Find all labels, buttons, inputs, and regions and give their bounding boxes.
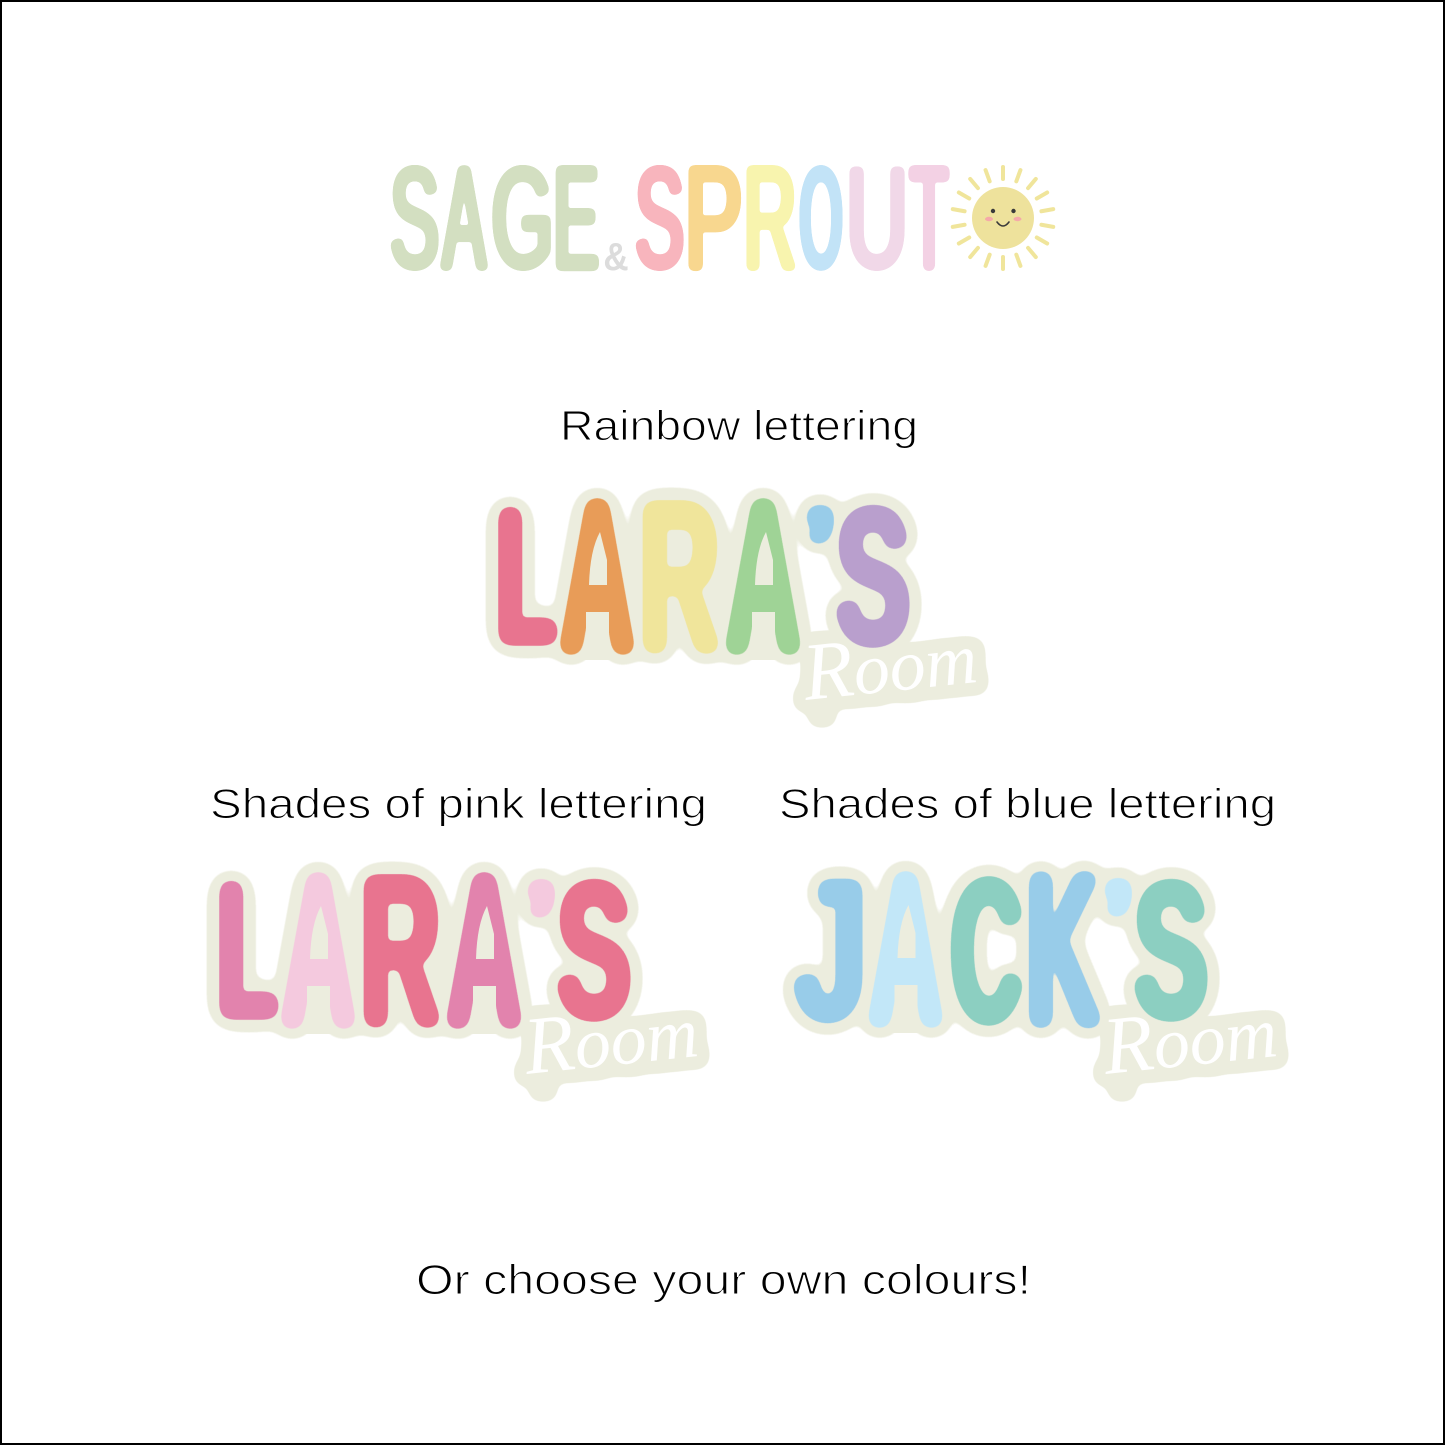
rainbow letters: A xyxy=(732,460,794,694)
sign backing: L xyxy=(218,848,275,1052)
sign backing: L xyxy=(497,474,554,678)
name sign: pink Lara's Room xyxy=(218,834,702,1092)
sign backing: R xyxy=(641,464,718,691)
logo word: SPROUT: S xyxy=(635,138,684,297)
pink letters: R xyxy=(362,838,439,1065)
logo word: SPROUT: T xyxy=(910,137,948,299)
rainbow letters: ’ xyxy=(804,488,836,616)
sign backing xyxy=(798,832,1281,1092)
blue letters xyxy=(798,832,1205,1067)
logo word: SPROUT: R xyxy=(744,138,796,300)
blue letters: C xyxy=(953,844,1020,1058)
script word: Room: Room xyxy=(1097,983,1281,1092)
sign backing: C xyxy=(953,844,1020,1058)
sign backing: R xyxy=(362,838,439,1065)
sign backing: A xyxy=(566,461,628,694)
name sign: blue Jack's Room xyxy=(798,832,1281,1092)
logo word: SPROUT: P xyxy=(684,138,743,300)
closing line: Or choose your own colours!: Or choose your own colours! xyxy=(416,1256,1031,1303)
sign backing: S xyxy=(559,850,628,1052)
blue letters: ’ xyxy=(1102,861,1134,989)
sign backing: J xyxy=(798,845,865,1055)
sign backing: S xyxy=(1136,850,1205,1052)
logo: Sage & Sprout xyxy=(390,136,1053,300)
blue letters: K xyxy=(1028,832,1096,1066)
rainbow letters: A xyxy=(566,461,628,694)
script word: Room: Room xyxy=(518,983,702,1092)
sign backing: S xyxy=(838,476,907,678)
logo word: SPROUT: O xyxy=(800,138,842,297)
logo word: SAGE: A xyxy=(443,137,485,299)
logo ampersand: & xyxy=(603,234,629,278)
sign backing: Room xyxy=(1097,983,1281,1092)
pink letters xyxy=(218,834,628,1068)
name sign: rainbow Lara's Room xyxy=(497,460,981,718)
rainbow letters: R xyxy=(641,464,718,691)
sign backing: A xyxy=(874,834,937,1067)
heading: Rainbow lettering: Rainbow lettering xyxy=(560,402,918,449)
pink letters: L xyxy=(218,848,275,1052)
heading: Shades of pink lettering: Shades of pink lettering xyxy=(210,780,707,827)
sign backing: K xyxy=(1028,832,1096,1066)
rainbow letters: L xyxy=(497,474,554,678)
heading: Shades of blue lettering: Shades of blue lettering xyxy=(779,780,1276,827)
logo word: SAGE: S xyxy=(390,138,439,297)
sign backing: Room xyxy=(518,983,702,1092)
pink letters: S xyxy=(559,850,628,1052)
pink letters: ’ xyxy=(525,862,557,990)
logo word: SPROUT xyxy=(635,137,948,300)
sign backing: A xyxy=(732,460,794,694)
logo word: SAGE: E xyxy=(553,136,599,299)
sign backing: A xyxy=(287,835,349,1068)
script word: Room: Room xyxy=(797,609,981,718)
pink letters: A xyxy=(453,834,515,1068)
sign backing: ’ xyxy=(804,488,836,616)
sign backing xyxy=(218,834,702,1092)
blue letters: A xyxy=(874,834,937,1067)
logo word: SPROUT: U xyxy=(846,139,908,297)
sign backing: ’ xyxy=(525,862,557,990)
blue letters: S xyxy=(1136,850,1205,1052)
sign backing: ’ xyxy=(1102,861,1134,989)
logo word: SAGE: G xyxy=(491,140,554,297)
logo word: SAGE xyxy=(390,136,599,299)
icon: smiling sun xyxy=(953,167,1053,269)
pink letters: A xyxy=(287,835,349,1068)
sign backing: A xyxy=(453,834,515,1068)
sign backing xyxy=(497,460,981,718)
sign backing: Room xyxy=(797,609,981,718)
rainbow letters xyxy=(497,460,907,694)
blue letters: J xyxy=(798,845,865,1055)
rainbow letters: S xyxy=(838,476,907,678)
